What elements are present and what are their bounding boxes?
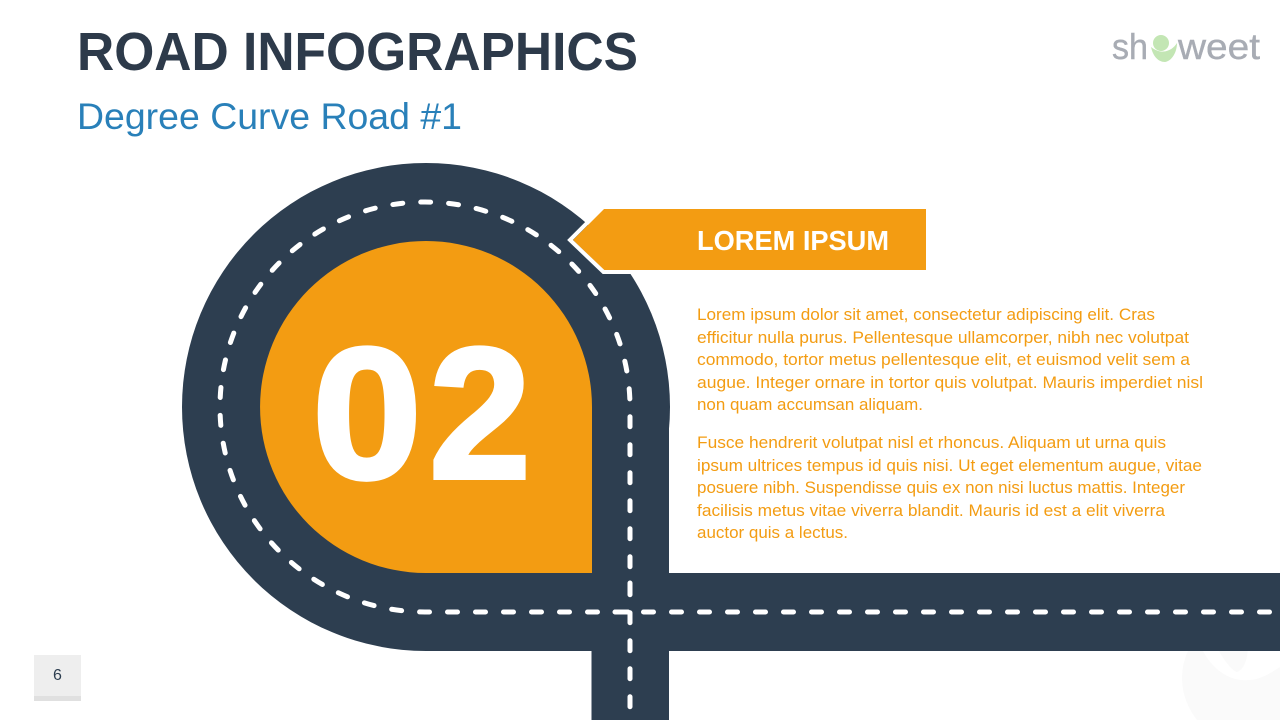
big number 02: 0 [312, 309, 422, 518]
text block: first paragraph: Lorem ipsum dolor sit amet, consectetur adipiscing elit. Cras [697, 305, 1155, 324]
text block: first paragraph: augue. Integer ornare in tortor quis volutpat. Mauris imperdiet nisl [697, 373, 1203, 392]
text block: second paragraph: posuere nibh. Suspendisse quis ex non nisi luctus mattis. Integer [697, 478, 1185, 497]
text block: second paragraph: ipsum ultrices tempus id quis nisi. Ut eget elementum augue, vitae [697, 456, 1202, 475]
text block: second paragraph: auctor quis a lectus. [697, 523, 848, 542]
text block: first paragraph: commodo, tortor metus pellentesque elit, et euismod velit sem a [697, 350, 1191, 369]
logo: showeet [1112, 26, 1260, 67]
text block: second paragraph: Fusce hendrerit volutpat nisl et rhoncus. Aliquam ut urna quis [697, 433, 1166, 452]
road centre dashed line: crossing piece [615, 583, 630, 612]
big number 02: 2 [429, 309, 531, 518]
page number box [34, 655, 81, 701]
text block: first paragraph: non quam accumsan aliquam. [697, 395, 923, 414]
text block: first paragraph: efficitur nulla purus. Pellentesque ullamcorper, nibh nec volutpat [697, 328, 1189, 347]
orange teardrop [260, 241, 592, 573]
text block: second paragraph: facilisis metus vitae viverra blandit. Mauris id est a elit viverra [697, 501, 1166, 520]
logo: showeet: weet [1177, 26, 1260, 67]
road centre dashed line: horizontal and loop [220, 202, 1269, 720]
road: navy circular loop with straight branches [182, 163, 1280, 720]
subtitle: Degree Curve Road #1 [77, 96, 462, 137]
callout banner arrow [570, 206, 926, 272]
text block: first paragraph [697, 305, 1203, 414]
page number box: 6 [53, 667, 62, 684]
watermark: faint logo bottom right [1182, 606, 1280, 720]
text block: second paragraph [697, 433, 1202, 542]
logo: showeet: sh [1112, 26, 1148, 67]
banner label: LOREM IPSUM [697, 225, 889, 256]
big number 02 [312, 309, 531, 518]
title: ROAD INFOGRAPHICS [77, 22, 638, 82]
